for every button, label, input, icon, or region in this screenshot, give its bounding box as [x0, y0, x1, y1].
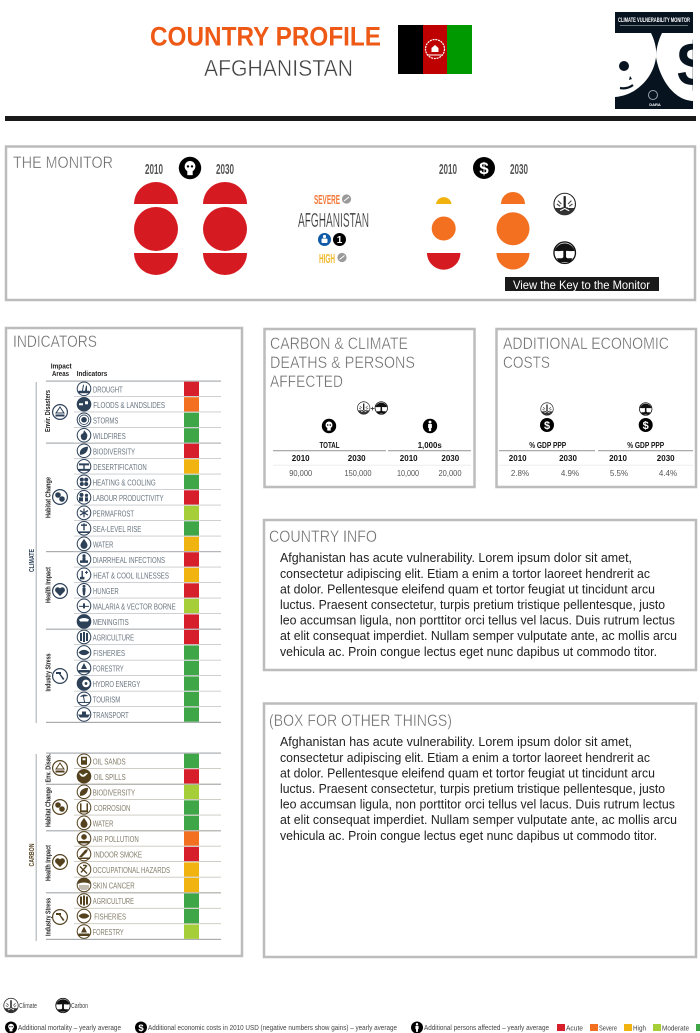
legend: additional persons affected: Additional persons affected – yearly average — [424, 1025, 549, 1032]
row: tourism — [74, 692, 221, 707]
heading: additional economic costs: COSTS — [503, 354, 550, 372]
legend — [4, 998, 700, 1033]
data table: economic costs: 2010 — [509, 454, 527, 463]
text block: other things body: at dolor. Pellentesque eleifend quam et tortor feugiat ut tincidunt arcu — [280, 766, 655, 780]
text block: country info body: leo accumsan ligula, non porttitor orci tellus vel lacus. Duis rutrum lectus — [280, 614, 675, 628]
impact area: environmental disasters: Env. Disas. — [46, 753, 52, 782]
impact area: health impact — [46, 844, 67, 881]
row: hydro energy — [74, 676, 221, 692]
climate table — [29, 380, 221, 723]
data table: economic costs: 2030 — [559, 454, 577, 463]
row: drought — [74, 382, 221, 397]
row: floods and landslides: FLOODS & LANDSLIDES — [93, 401, 165, 410]
legend: additional persons affected — [411, 1022, 549, 1033]
row: air pollution: AIR POLLUTION — [93, 835, 139, 844]
data table: economic costs: 4.9% — [561, 469, 579, 478]
icon: skull — [322, 419, 336, 433]
chart: climate and carbon economic cost 2030 — [496, 192, 530, 270]
icon: carbon — [554, 242, 575, 263]
row: oil sands: OIL SANDS — [93, 757, 126, 766]
carbon table — [29, 752, 221, 941]
legend: acute: Acute — [566, 1026, 583, 1032]
data table: economic costs: % GDP PPP — [627, 441, 665, 450]
legend: climate: Climate — [19, 1003, 37, 1010]
label: severe rating: SEVERE — [314, 193, 340, 207]
heading: carbon and climate deaths: AFFECTED — [270, 373, 343, 391]
text block: other things body: luctus. Praesent consectetur, turpis pretium tristique pellentesque, justo — [280, 782, 665, 796]
data table: economic costs: 4.4% — [659, 469, 677, 478]
row: drought: DROUGHT — [93, 385, 123, 394]
heading: country info: COUNTRY INFO — [269, 528, 377, 546]
row: transport — [77, 707, 199, 722]
panel: carbon and climate deaths and persons affected — [264, 329, 474, 487]
row: tourism: TOURISM — [93, 696, 121, 705]
table header: Indicators — [77, 371, 107, 378]
row: biodiversity — [74, 444, 221, 459]
panel: box for other things — [264, 704, 696, 957]
row: heat and cool illnesses: HEAT & COOL ILLNESSES — [93, 571, 169, 580]
row: forestry — [74, 661, 221, 676]
impact area: health impact: Health Impact — [46, 566, 52, 603]
row: storms — [74, 413, 221, 428]
impact area: industry stress — [46, 898, 67, 936]
row: fisheries: FISHERIES — [94, 913, 126, 922]
icon: climate — [554, 193, 575, 215]
row: storms: STORMS — [93, 416, 118, 425]
legend: carbon: Carbon — [71, 1003, 88, 1010]
icons: rank badges — [318, 233, 346, 246]
row: air pollution — [74, 831, 221, 846]
text block: other things body: vehicula ac. Proin congue lectus eget nunc dapibus ut commodo titor. — [280, 829, 657, 843]
data table: economic costs — [499, 441, 693, 478]
icon: climate vulnerability monitor report cover — [615, 12, 700, 109]
impact area: environmental disasters: Envir. Disasters — [45, 390, 52, 432]
heading: indicators: INDICATORS — [13, 333, 97, 351]
data table: deaths and persons affected — [273, 441, 471, 478]
panel: the monitor — [6, 146, 695, 300]
row: labour productivity: LABOUR PRODUCTIVITY — [93, 494, 164, 503]
row: permafrost — [74, 506, 221, 521]
row: occupational hazards: OCCUPATIONAL HAZARDS — [93, 866, 170, 875]
carbon axis: CARBON — [29, 844, 36, 866]
label: economic 2030: 2030 — [510, 161, 528, 178]
row: water: WATER — [93, 819, 114, 828]
row: hunger: HUNGER — [93, 587, 119, 596]
legend: additional economic costs — [135, 1022, 397, 1033]
impact area: health impact — [46, 566, 67, 603]
text block: other things body: leo accumsan ligula, non porttitor orci tellus vel lacus. Duis rutrum lectus — [280, 798, 675, 812]
data table: deaths and persons affected: 2030 — [441, 454, 460, 463]
row: labour productivity — [74, 490, 221, 505]
data table: deaths and persons affected: 90,000 — [289, 469, 313, 478]
row: wildfires: WILDFIRES — [93, 432, 126, 441]
impact area: industry stress — [46, 653, 67, 692]
icon: climate vulnerability monitor report cover: DARA — [649, 102, 661, 107]
icons: climate economic cost: $ — [544, 420, 550, 432]
legend: severe — [590, 1024, 617, 1032]
chart: climate and carbon economic cost 2010 — [427, 197, 460, 270]
header divider bar — [5, 116, 696, 121]
data table: deaths and persons affected: 10,000 — [397, 469, 419, 478]
icon: flag of Afghanistan — [398, 25, 472, 74]
panel: indicators — [6, 328, 242, 956]
row: diarrheal infections: DIARRHEAL INFECTIONS — [93, 556, 165, 565]
group dividers — [46, 752, 221, 940]
icon: dollar: $ — [479, 159, 489, 178]
icons: carbon economic cost — [639, 403, 653, 432]
button: view the key: View the Key to the Monitor — [513, 278, 650, 292]
icons: carbon economic cost: $ — [643, 420, 649, 432]
row: malaria and vector borne — [74, 599, 221, 614]
text block: country info body: Afghanistan has acute vulnerability. Lorem ipsum dolor sit amet, — [280, 551, 632, 565]
text block: country info body: luctus. Praesent consectetur, turpis pretium tristique pellentesque, justo — [280, 598, 665, 612]
row: fisheries — [74, 645, 221, 660]
data table: deaths and persons affected: 20,000 — [438, 469, 462, 478]
label: country name in monitor: AFGHANISTAN — [298, 210, 369, 232]
row: indoor smoke — [74, 847, 221, 862]
row: hunger — [74, 583, 221, 598]
panel: country info — [264, 520, 696, 670]
legend: acute — [557, 1024, 583, 1032]
text block: country info body: at dolor. Pellentesque eleifend quam et tortor feugiat ut tincidunt arcu — [280, 582, 655, 596]
text block: country info body: vehicula ac. Proin congue lectus eget nunc dapibus ut commodo titor. — [280, 645, 657, 659]
row: water — [74, 537, 221, 552]
row: agriculture: AGRICULTURE — [93, 897, 134, 906]
data table: deaths and persons affected: TOTAL — [320, 441, 340, 450]
row: meningitis — [74, 614, 221, 630]
text block: country info body: at elit consequat imperdiet. Nullam semper vulputate ante, ac mollis arcu — [280, 629, 677, 643]
row: heating and cooling — [74, 475, 221, 490]
row: agriculture — [74, 630, 221, 645]
data table: economic costs: 2.8% — [511, 469, 529, 478]
row: biodiversity: BIODIVERSITY — [93, 788, 135, 797]
row: oil spills — [74, 769, 221, 784]
text block: other things body: at elit consequat imperdiet. Nullam semper vulputate ante, ac mollis arcu — [280, 813, 677, 827]
row: hydro energy: HYDRO ENERGY — [93, 680, 141, 689]
legend: high: High — [633, 1026, 646, 1032]
row: fisheries — [74, 909, 221, 924]
row: skin cancer: SKIN CANCER — [93, 882, 135, 891]
legend: additional mortality: Additional mortality – yearly average — [18, 1025, 121, 1032]
table header — [51, 364, 107, 378]
heading: additional economic costs: ADDITIONAL ECONOMIC — [503, 335, 669, 353]
row: floods and landslides — [74, 397, 221, 412]
impact area: habitat change — [46, 787, 67, 827]
icon: person — [423, 419, 437, 433]
data table: deaths and persons affected: 2030 — [348, 454, 366, 463]
legend: moderate — [653, 1024, 689, 1032]
table header: Areas — [52, 371, 69, 378]
icons: climate economic cost — [540, 403, 554, 432]
row: wildfires — [74, 428, 221, 443]
legend: climate — [4, 998, 37, 1013]
legend: low swatch — [696, 1024, 700, 1031]
data table: deaths and persons affected: 1,000s — [418, 441, 442, 450]
row: transport: TRANSPORT — [93, 711, 129, 720]
heading: box for other things: (BOX FOR OTHER THINGS) — [269, 712, 452, 730]
chart: climate and carbon mortality 2010 — [134, 182, 178, 275]
label: economic 2010: 2010 — [439, 161, 457, 178]
icon: skull — [179, 157, 201, 179]
table header: Impact — [51, 364, 72, 370]
impact area: environmental disasters — [45, 390, 67, 432]
icons: rank badges: 1 — [337, 235, 343, 246]
legend: additional economic costs: Additional economic costs in 2010 USD (negative numbers show gains) – yearly average — [148, 1025, 397, 1032]
chart: climate and carbon mortality 2030 — [203, 182, 247, 275]
row: agriculture — [74, 894, 221, 909]
data table: deaths and persons affected: 150,000 — [344, 469, 372, 478]
title: country profile: COUNTRY PROFILE — [150, 22, 381, 52]
panel: additional economic costs — [496, 329, 696, 487]
heading: the monitor: THE MONITOR — [13, 154, 113, 172]
impact area: industry stress: Industry Stress — [46, 653, 52, 692]
icon: dollar — [473, 157, 495, 179]
row: corrosion: CORROSION — [94, 804, 130, 813]
row: heat and cool illnesses — [74, 568, 221, 583]
group dividers — [46, 380, 221, 723]
row: fisheries: FISHERIES — [93, 649, 125, 658]
heading: carbon and climate deaths — [270, 335, 415, 391]
data table: deaths and persons affected: 2010 — [400, 454, 418, 463]
row: occupational hazards — [74, 862, 221, 878]
text block: country info body — [280, 551, 677, 659]
icons: climate plus carbon — [357, 402, 388, 414]
data table: deaths and persons affected: 2010 — [292, 454, 310, 463]
text block: other things body: Afghanistan has acute vulnerability. Lorem ipsum dolor sit amet, — [280, 735, 632, 749]
row: corrosion — [74, 800, 221, 815]
row: water: WATER — [93, 540, 113, 549]
impact area: habitat change: Habitat Change — [46, 787, 52, 827]
legend: additional mortality — [5, 1022, 121, 1033]
text block: other things body — [280, 735, 677, 843]
data table: economic costs: 5.5% — [610, 469, 628, 478]
row: forestry: FORESTRY — [93, 928, 124, 937]
subtitle: country name: AFGHANISTAN — [204, 55, 353, 81]
row: desertification: DESERTIFICATION — [93, 463, 147, 472]
impact area: habitat change: Habitat Change — [46, 477, 52, 518]
legend: high — [624, 1024, 646, 1032]
row: indoor smoke: INDOOR SMOKE — [94, 851, 142, 860]
text block: other things body: consectetur adipiscing elit. Etiam a enim a tortor laoreet hendrerit ac — [280, 751, 650, 765]
row: diarrheal infections — [74, 552, 221, 567]
row: skin cancer — [74, 878, 221, 893]
heading: additional economic costs — [503, 335, 669, 372]
climate axis: CLIMATE — [29, 549, 36, 572]
row: sea-level rise — [74, 521, 221, 536]
row: permafrost: PERMAFROST — [93, 510, 134, 519]
row: forestry — [77, 924, 199, 939]
impact area: health impact: Health Impact — [46, 844, 52, 881]
row: oil sands — [74, 754, 221, 769]
row: agriculture: AGRICULTURE — [93, 634, 134, 643]
row: meningitis: MENINGITIS — [93, 618, 129, 627]
heading: carbon and climate deaths: CARBON & CLIMATE — [270, 335, 408, 353]
impact area: habitat change — [46, 477, 67, 518]
legend: carbon — [56, 998, 88, 1013]
row: malaria and vector borne: MALARIA & VECTOR BORNE — [93, 602, 176, 611]
data table: economic costs: 2010 — [609, 454, 627, 463]
row: heating and cooling: HEATING & COOLING — [93, 479, 156, 488]
impact area: environmental disasters — [46, 753, 67, 782]
row: biodiversity — [74, 785, 221, 800]
label: mortality 2030: 2030 — [216, 161, 234, 178]
row: sea-level rise: SEA-LEVEL RISE — [93, 525, 141, 534]
label: high rating: HIGH — [319, 252, 335, 266]
legend: severe: Severe — [599, 1026, 617, 1032]
icons: climate plus carbon: + — [370, 406, 375, 413]
text block: country info body: consectetur adipiscing elit. Etiam a enim a tortor laoreet hendrerit ac — [280, 567, 650, 581]
data table: economic costs: % GDP PPP — [529, 441, 567, 450]
impact area: industry stress: Industry Stress — [46, 898, 52, 936]
row: water — [74, 816, 221, 831]
row: oil spills: OIL SPILLS — [94, 773, 126, 782]
legend: moderate: Moderate — [662, 1026, 689, 1032]
data table: economic costs: 2030 — [657, 454, 675, 463]
heading: carbon and climate deaths: DEATHS & PERSONS — [270, 354, 415, 372]
row: biodiversity: BIODIVERSITY — [93, 447, 135, 456]
row: desertification — [74, 459, 221, 474]
label: mortality 2010: 2010 — [145, 161, 163, 178]
row: forestry: FORESTRY — [93, 665, 124, 674]
